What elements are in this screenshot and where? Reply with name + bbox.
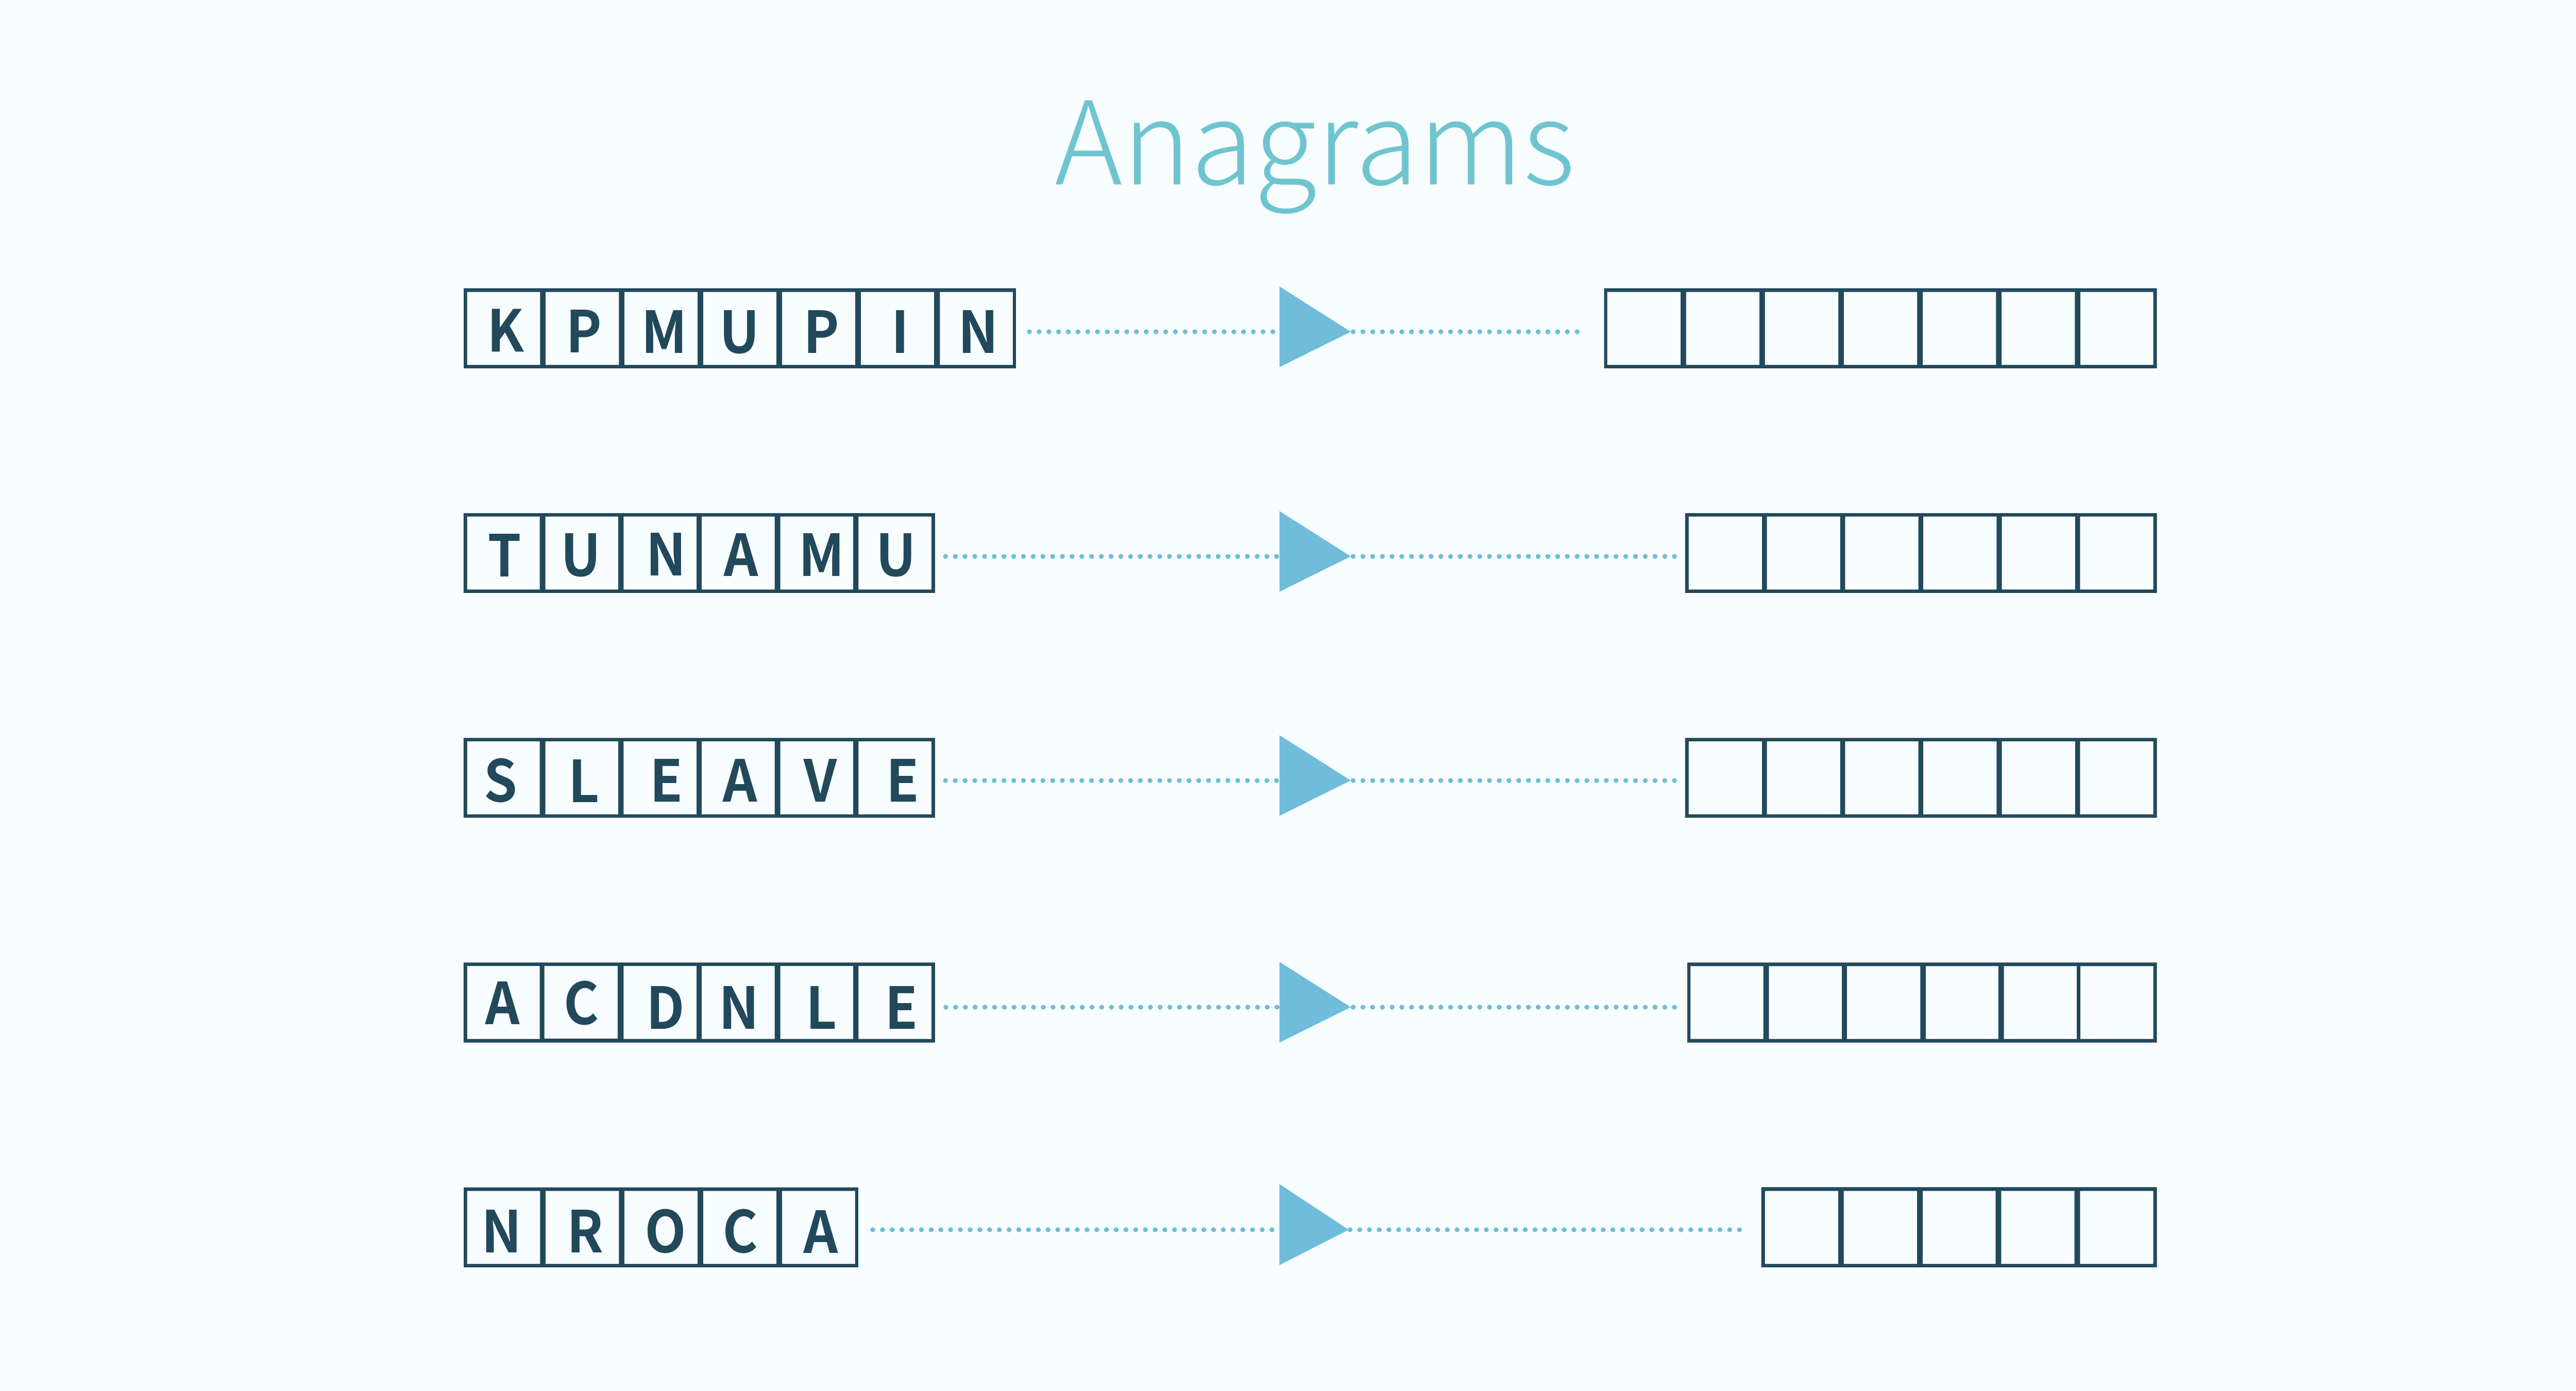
letter boxes: NROCA: R [567, 1186, 603, 1269]
dotted line and arrow [1029, 286, 1587, 367]
letter boxes: SLEAVE: A [722, 736, 757, 819]
dotted line and arrow [945, 735, 1676, 816]
letter boxes: KPMUPIN [464, 285, 1016, 370]
row 2: TUNAMU [464, 510, 2157, 593]
letter boxes: NROCA: N [481, 1186, 521, 1269]
letter boxes: NROCA: C [722, 1186, 758, 1269]
letter boxes: KPMUPIN: K [487, 285, 524, 369]
row 4: ACDNLE [464, 958, 2157, 1046]
letter boxes: KPMUPIN: P [803, 287, 839, 370]
empty answer boxes (5) [1761, 1187, 2157, 1267]
letter boxes: ACDNLE [464, 958, 935, 1046]
letter boxes: TUNAMU [464, 510, 935, 593]
row 5: NROCA [464, 1184, 2157, 1270]
empty answer boxes (7) [1604, 289, 2157, 368]
empty answer boxes (6) [1685, 738, 2157, 818]
letter boxes: ACDNLE: C [564, 958, 599, 1041]
letter boxes: KPMUPIN: P [566, 286, 602, 369]
letter boxes: TUNAMU: M [799, 510, 844, 593]
letter boxes: NROCA [464, 1186, 858, 1270]
letter boxes: KPMUPIN: M [641, 287, 687, 370]
letter boxes: NROCA: A [803, 1187, 838, 1270]
letter boxes: ACDNLE: A [485, 958, 520, 1041]
letter boxes: ACDNLE: D [646, 963, 684, 1046]
letter boxes: ACDNLE: N [719, 963, 759, 1046]
letter boxes: TUNAMU: A [723, 510, 758, 593]
row 1: KPMUPIN [464, 285, 2157, 370]
letter boxes: TUNAMU: T [487, 511, 521, 593]
letter boxes: KPMUPIN: I [891, 287, 909, 370]
dotted line and arrow [945, 511, 1676, 592]
letter boxes: TUNAMU: U [876, 510, 916, 593]
dotted line and arrow [873, 1184, 1749, 1265]
empty answer boxes (6) [1687, 962, 2157, 1043]
letter boxes: TUNAMU: N [646, 510, 686, 592]
letter boxes: ACDNLE: L [806, 963, 837, 1046]
letter boxes: SLEAVE: V [803, 736, 837, 819]
letter boxes: SLEAVE: E [650, 736, 683, 819]
empty answer boxes (6) [1685, 513, 2157, 593]
dotted line and arrow [946, 962, 1676, 1043]
letter boxes: NROCA: O [645, 1186, 686, 1269]
letter boxes: KPMUPIN: U [719, 287, 759, 370]
letter boxes: KPMUPIN: N [958, 287, 998, 370]
letter boxes: ACDNLE: E [885, 963, 918, 1046]
letter boxes: SLEAVE [464, 736, 935, 819]
title: Anagrams [1055, 50, 1575, 218]
letter boxes: SLEAVE: L [568, 736, 599, 819]
letter boxes: SLEAVE: E [886, 736, 919, 819]
letter boxes: SLEAVE: S [484, 736, 517, 819]
row 3: SLEAVE [464, 735, 2157, 819]
letter boxes: TUNAMU: U [561, 510, 601, 593]
